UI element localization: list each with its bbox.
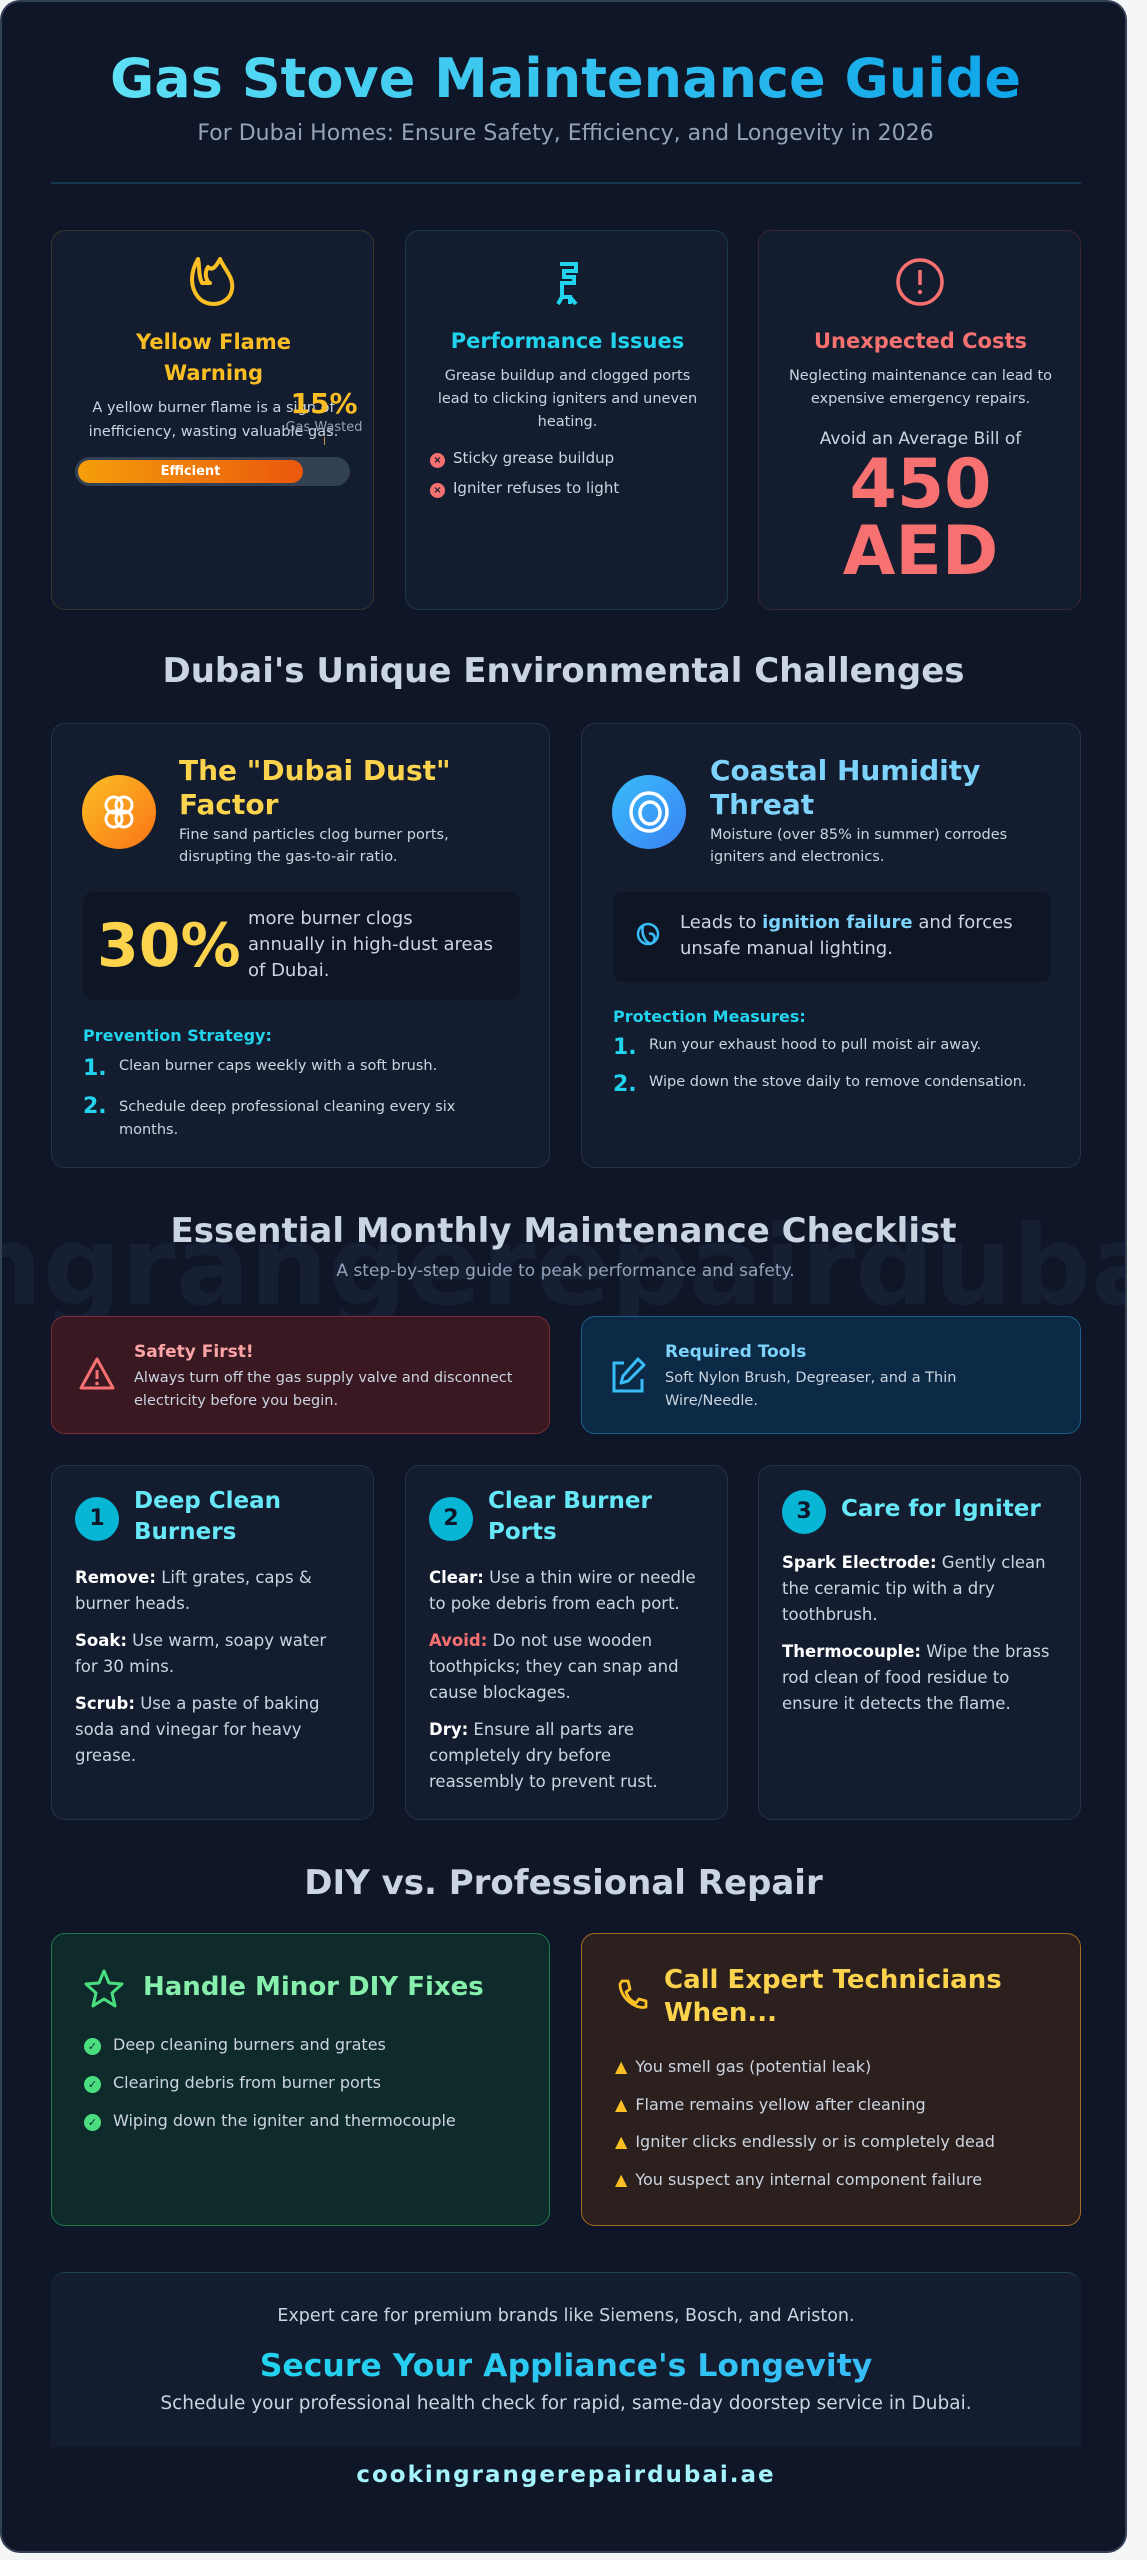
- text: Neglecting maintenance can lead to expensive emergency repairs.: [789, 368, 1052, 407]
- bar: Efficient: [161, 464, 220, 479]
- panel: humidity: Moisture (over 85% in summer) corrodes: [710, 827, 1007, 843]
- icon: flame: [190, 256, 234, 306]
- protection list: Protection Measures:: [613, 1007, 806, 1026]
- panel: step 1: Remove: Lift grates, caps & burner heads.: [75, 1568, 312, 1613]
- text: A yellow burner flame is a sign of: [92, 400, 335, 416]
- panel: CTA: Secure Your Appliance's Longevity: [260, 2348, 872, 2384]
- panel: dust: 1.: [83, 1056, 107, 1081]
- title: Warning: [164, 361, 263, 385]
- protection list: [613, 1007, 1026, 1097]
- panel: dust: Schedule deep professional cleaning every six months.: [119, 1099, 455, 1138]
- panel: step 3: Spark Electrode: Gently clean the ceramic tip with a dry toothbrush.: [782, 1553, 1046, 1624]
- bar: [75, 457, 350, 486]
- panel: step 2: Ports: [488, 1519, 557, 1545]
- panel: step 1: Scrub: Use a paste of baking soda and vinegar for heavy grease.: [75, 1694, 320, 1765]
- stat box: annually in high-dust areas: [248, 934, 493, 955]
- panel: step 3: [758, 1465, 1081, 1820]
- panel: step 2: Clear Burner: [488, 1488, 652, 1514]
- text: inefficiency, wasting valuable gas.: [89, 424, 338, 440]
- callout: safety: [51, 1316, 550, 1434]
- title: [136, 330, 291, 385]
- callout: tools: Wire/Needle.: [665, 1393, 758, 1409]
- prevention list: [83, 1026, 455, 1138]
- title: Performance Issues: [451, 329, 684, 353]
- icon: alert: [896, 258, 944, 306]
- callout: safety: electricity before you begin.: [134, 1393, 338, 1409]
- panel: performance: ×: [433, 485, 442, 496]
- panel: CTA: Schedule your professional health check for rapid, same-day doorstep service in Dubai.: [160, 2393, 972, 2414]
- title: Yellow Flame: [136, 330, 291, 354]
- panel: step 1: 1: [89, 1506, 105, 1531]
- prevention list: Prevention Strategy:: [83, 1026, 272, 1045]
- panel: step 3: Care for Igniter: [841, 1496, 1041, 1522]
- panel: step 1: [51, 1465, 374, 1820]
- panel: CTA: Expert care for premium brands like Siemens, Bosch, and Ariston.: [277, 2306, 855, 2326]
- heading: environmental: Dubai's Unique Environmental Challenges: [162, 651, 965, 691]
- stat 15%: 15%: [290, 387, 358, 420]
- panel: professional: [581, 1933, 1081, 2226]
- text: Grease buildup and clogged ports lead to clicking igniters and uneven heating.: [438, 368, 697, 430]
- panel: step 2: 2: [443, 1506, 459, 1531]
- callout: Leads to ignition failure and forces: [680, 912, 1013, 933]
- panel: humidity: [581, 723, 1081, 1168]
- panel: costs: [758, 230, 1081, 610]
- panel: yellow flame: [51, 230, 374, 610]
- stat box: [83, 892, 520, 1000]
- panel: DIY: Deep cleaning burners and grates: [113, 2035, 386, 2054]
- panel: DIY: [51, 1933, 550, 2226]
- panel: step 1: Deep Clean: [134, 1488, 281, 1514]
- icon: humidity: [612, 775, 686, 849]
- stat box: more burner clogs: [248, 908, 413, 929]
- stat 15%: [285, 387, 363, 445]
- panel: step 2: Avoid: Do not use wooden toothpicks; they can snap and cause blockages.: [429, 1631, 679, 1702]
- panel: costs: Avoid an Average Bill of: [820, 429, 1021, 449]
- stat 450 AED: 450: [850, 445, 991, 524]
- panel: humidity: Run your exhaust hood to pull moist air away.: [649, 1037, 981, 1053]
- panel: step 3: 3: [796, 1499, 812, 1524]
- panel: humidity: 1.: [613, 1035, 637, 1060]
- panel: DIY: Clearing debris from burner ports: [113, 2073, 381, 2092]
- panel: step 2: Dry: Ensure all parts are completely dry before reassembly to prevent rust.: [429, 1720, 658, 1791]
- footer url: cookingrangerepairdubai.ae: [356, 2462, 776, 2488]
- stat 450 AED: AED: [843, 512, 998, 591]
- title: Threat: [710, 788, 814, 821]
- title: Factor: [179, 788, 278, 821]
- panel: dust: 2.: [83, 1094, 107, 1119]
- icon: igniter: [556, 262, 578, 306]
- panel: performance: Igniter refuses to light: [453, 479, 619, 497]
- panel: step 3: Thermocouple: Wipe the brass rod clean of food residue to ensure it detects the flame.: [782, 1642, 1050, 1713]
- title: Coastal Humidity: [710, 754, 980, 787]
- stat 450 AED: [843, 445, 998, 591]
- stat box: 30%: [97, 911, 241, 981]
- bullets: ×: [433, 455, 442, 466]
- panel: dust: [51, 723, 550, 1168]
- panel: professional: ▲ You suspect any internal component failure: [615, 2170, 982, 2189]
- panel: dust: Fine sand particles clog burner ports,: [179, 827, 449, 843]
- callout: safety: Safety First!: [134, 1342, 254, 1362]
- title: Gas Stove Maintenance Guide: [110, 47, 1021, 110]
- title: [179, 754, 451, 821]
- title: Unexpected Costs: [814, 329, 1027, 353]
- panel: DIY: Handle Minor DIY Fixes: [143, 1972, 484, 2002]
- subtitle: For Dubai Homes: Ensure Safety, Efficiency, and Longevity in 2026: [197, 121, 934, 146]
- callout: tools: [581, 1316, 1081, 1434]
- panel: humidity: Wipe down the stove daily to remove condensation.: [649, 1074, 1026, 1090]
- panel: professional: ▲ You smell gas (potential leak): [615, 2057, 871, 2076]
- callout: tools: Soft Nylon Brush, Degreaser, and a Thin: [665, 1370, 956, 1386]
- panel: dust: Clean burner caps weekly with a soft brush.: [119, 1058, 437, 1074]
- panel: professional: ▲ Igniter clicks endlessly or is completely dead: [615, 2132, 995, 2151]
- panel: humidity: 2.: [613, 1072, 637, 1097]
- panel: step 2: [405, 1465, 728, 1820]
- panel: DIY: ✓: [88, 2078, 97, 2091]
- heading: DIY: DIY vs. Professional Repair: [304, 1863, 823, 1903]
- panel: dust: disrupting the gas-to-air ratio.: [179, 849, 397, 865]
- panel: professional: When...: [664, 1998, 777, 2028]
- callout: unsafe manual lighting.: [680, 938, 893, 959]
- panel: DIY: ✓: [88, 2040, 97, 2053]
- title: The "Dubai Dust": [179, 754, 451, 787]
- panel: DIY: Wiping down the igniter and thermocouple: [113, 2111, 456, 2130]
- panel: step 1: Soak: Use warm, soapy water for 30 mins.: [75, 1631, 326, 1676]
- panel: CTA: [51, 2272, 1081, 2507]
- panel: professional: ▲ Flame remains yellow after cleaning: [615, 2095, 926, 2114]
- icon: dust: [82, 775, 156, 849]
- stat 15%: Gas Wasted: [285, 420, 363, 435]
- stat box: of Dubai.: [248, 960, 330, 981]
- text: [89, 400, 338, 440]
- panel: step 2: Clear: Use a thin wire or needle to poke debris from each port.: [429, 1568, 696, 1613]
- callout: tools: Required Tools: [665, 1342, 806, 1362]
- callout: safety: Always turn off the gas supply valve and disconnect: [134, 1370, 512, 1386]
- panel: performance: [405, 230, 728, 610]
- footer url: [51, 2447, 1081, 2508]
- heading: checklist: Essential Monthly Maintenance Checklist: [171, 1211, 956, 1251]
- panel: humidity: igniters and electronics.: [710, 849, 884, 865]
- bullets: Sticky grease buildup: [453, 449, 614, 467]
- panel: professional: Call Expert Technicians: [664, 1965, 1002, 1995]
- panel: DIY: ✓: [88, 2116, 97, 2129]
- text: A step-by-step guide to peak performance and safety.: [336, 1261, 795, 1281]
- title: [710, 754, 980, 821]
- panel: step 1: Burners: [134, 1519, 236, 1545]
- callout: [613, 892, 1051, 982]
